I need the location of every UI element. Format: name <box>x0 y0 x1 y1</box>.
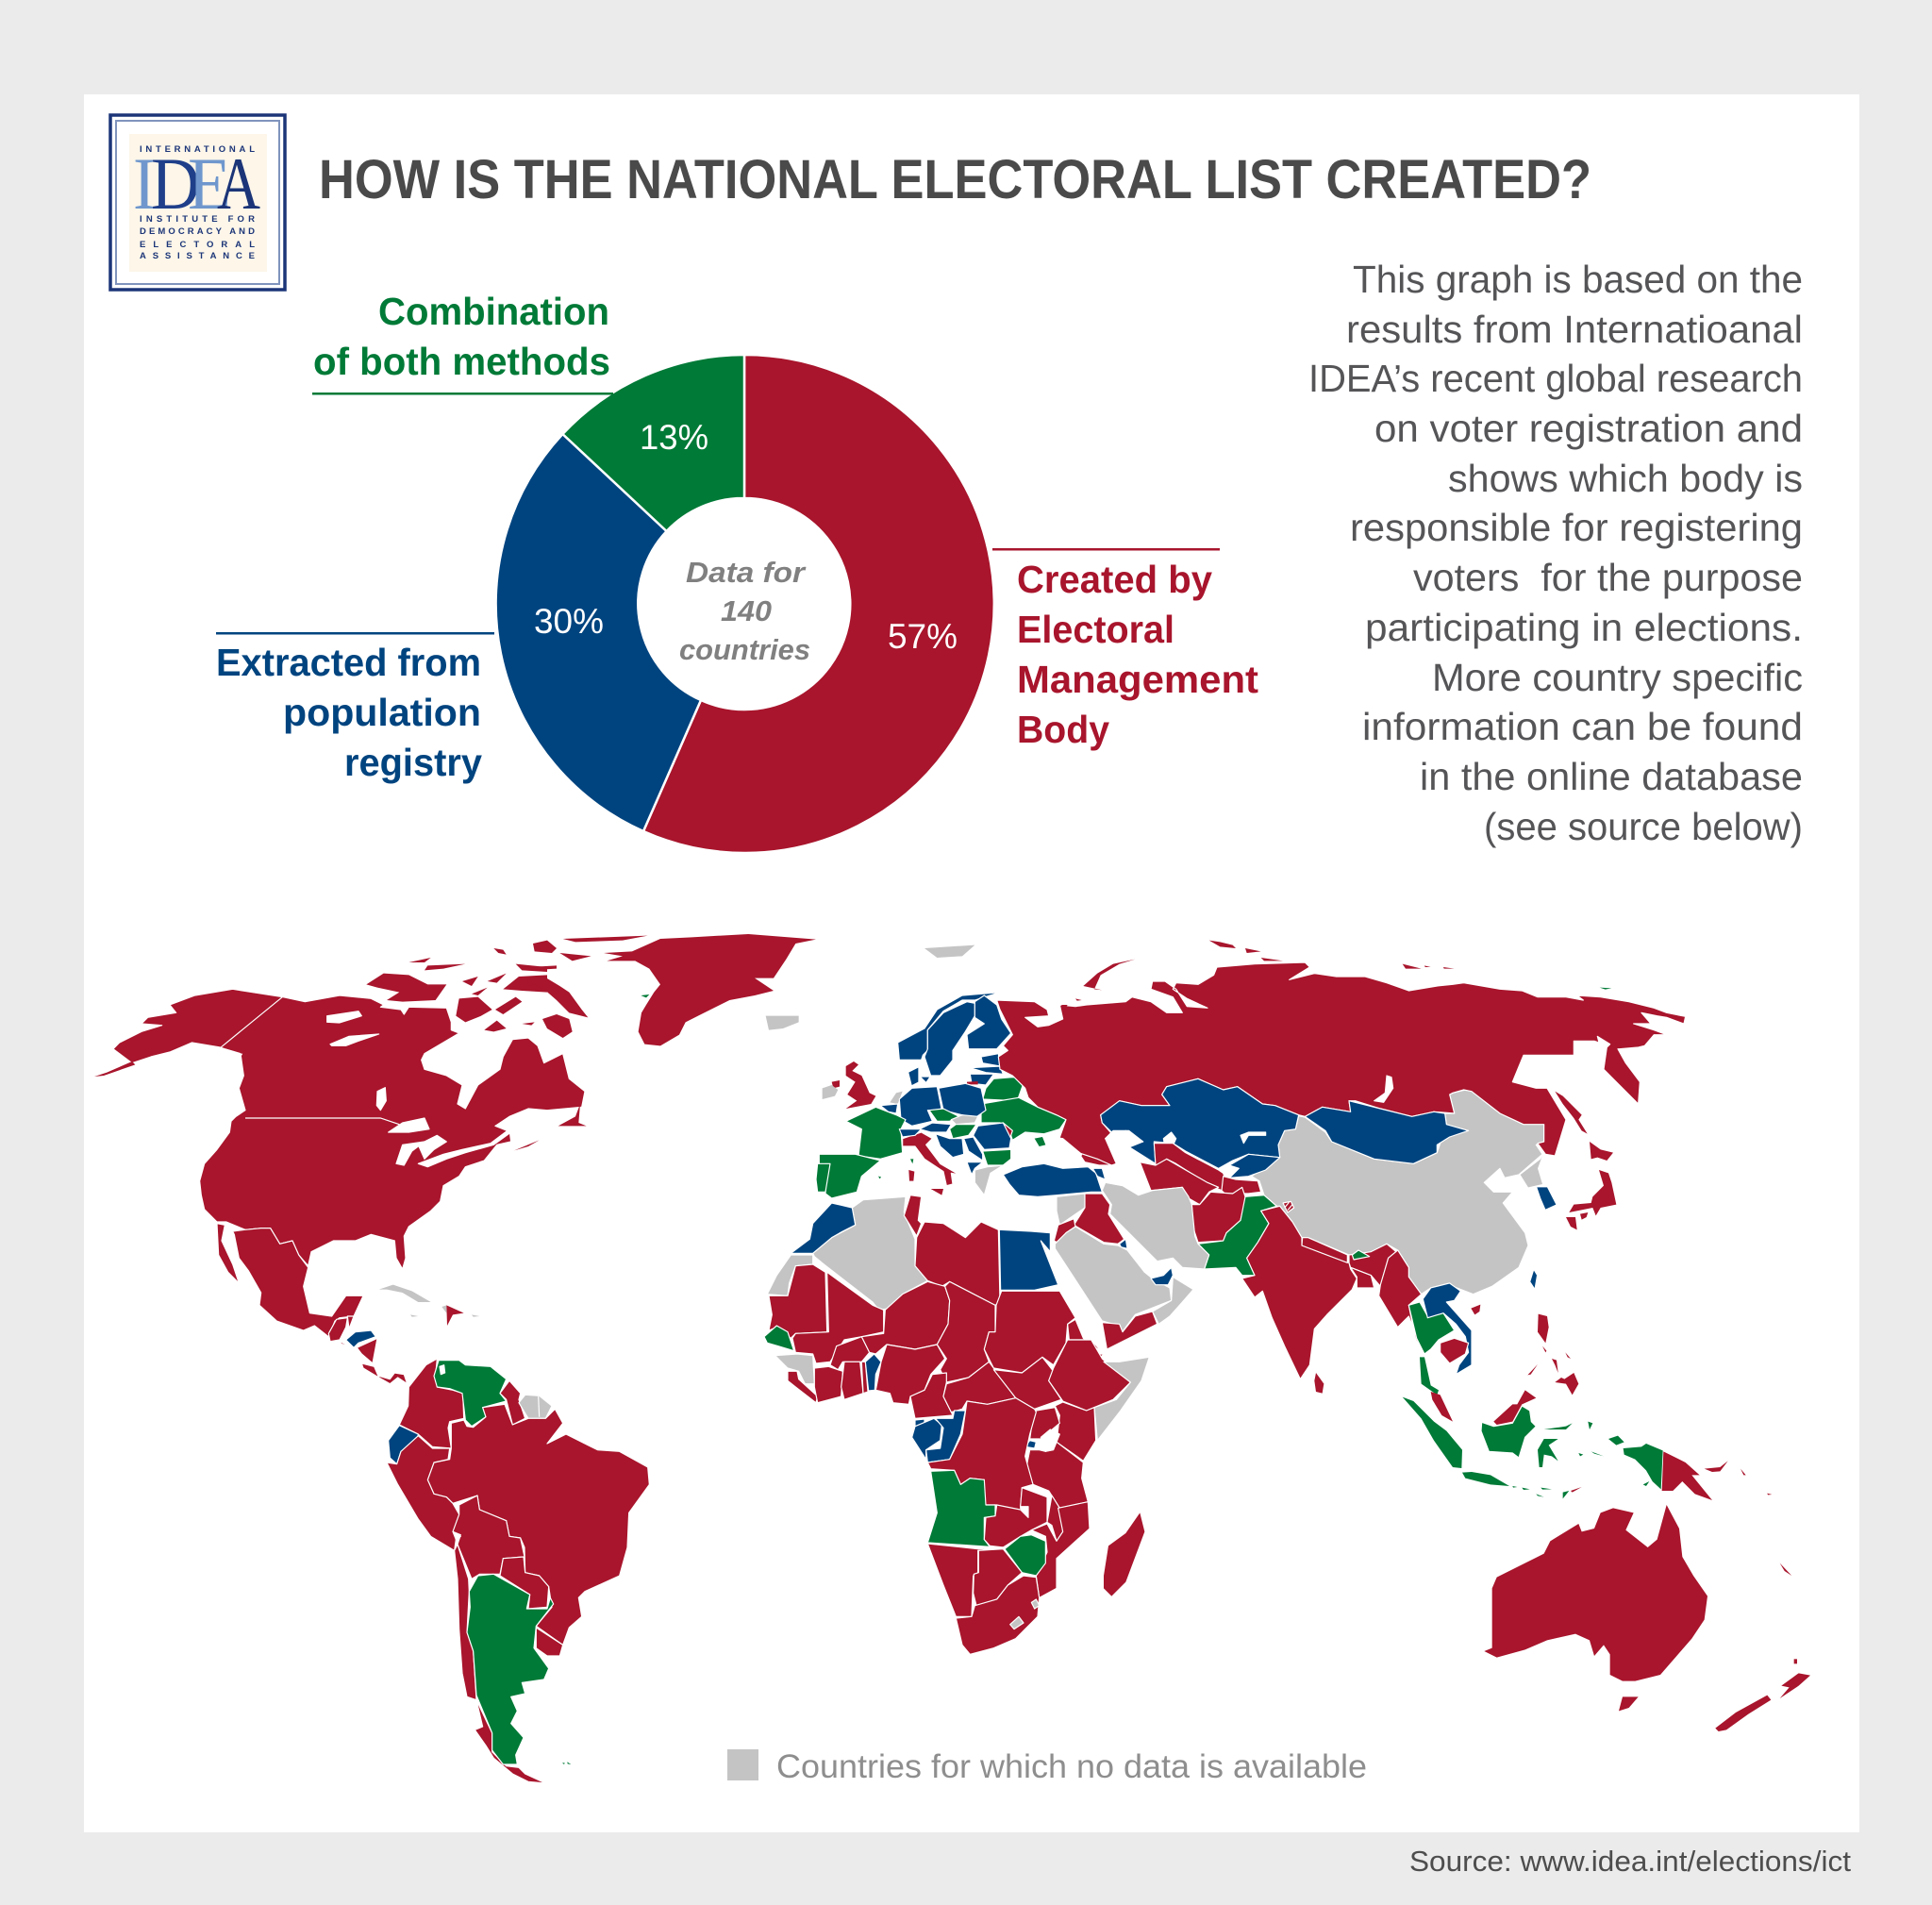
logo: International IDEA: INSTITUTE FOR <box>140 214 255 225</box>
donut percentages: 57% <box>888 617 958 656</box>
label: combination of both methods: Combination <box>378 290 609 333</box>
text block: explanation: IDEA’s recent global research <box>1308 357 1803 400</box>
text block: explanation: on voter registration and <box>1374 407 1803 450</box>
text block: explanation: shows which body is <box>1448 457 1803 500</box>
map: East Asia <box>1471 988 1616 1395</box>
segment: combination 13% <box>562 355 744 531</box>
label: created by electoral management body: Created by <box>1017 558 1212 601</box>
legend: no data: Countries for which no data is available <box>776 1748 1367 1785</box>
text block: explanation: This graph is based on the <box>1353 258 1803 301</box>
logo: International IDEA: I <box>133 142 156 225</box>
text block: explanation: in the online database <box>1420 755 1803 798</box>
text block: explanation: results from Internatioanal <box>1346 308 1803 351</box>
logo: International IDEA: INTERNATIONAL <box>140 144 255 155</box>
logo: International IDEA: E <box>188 142 231 225</box>
map: South America <box>387 1359 649 1783</box>
logo: International IDEA: D <box>151 142 200 225</box>
logo: International IDEA: ELECTORAL <box>140 240 255 250</box>
donut centre note: Data for <box>686 556 807 589</box>
text block: explanation: (see source below) <box>1484 805 1803 848</box>
donut percentages <box>534 418 958 656</box>
map: Europe <box>816 993 1066 1198</box>
label: extracted from population registry <box>216 632 494 784</box>
label: extracted from population registry: registry <box>344 741 482 784</box>
logo: International IDEA: A <box>217 142 260 225</box>
label: created by electoral management body: Body <box>1017 708 1109 751</box>
logo: International IDEA: DEMOCRACY AND <box>140 226 255 237</box>
text block: explanation: More country specific <box>1432 656 1803 699</box>
label: created by electoral management body <box>992 548 1258 751</box>
map: Mexico and Central America <box>217 1224 479 1384</box>
text block: explanation <box>1308 258 1803 848</box>
donut percentages: 13% <box>640 418 708 457</box>
map: Maritime Southeast Asia and Oceania <box>1403 1390 1810 1731</box>
text block: explanation: participating in elections. <box>1365 606 1803 649</box>
text block: explanation: responsible for registering <box>1350 506 1803 549</box>
map: Greenland and Atlantic islands <box>604 934 974 1045</box>
logo: International IDEA <box>110 115 285 290</box>
map: Africa <box>764 1195 1149 1654</box>
world map <box>94 934 1810 1783</box>
donut centre note <box>679 556 810 666</box>
text block: explanation: information can be found <box>1362 705 1803 748</box>
source note: Source: www.idea.int/elections/ict <box>1409 1845 1851 1878</box>
label: created by electoral management body: Management <box>1017 658 1258 701</box>
label: combination of both methods: of both methods <box>313 340 610 383</box>
segment: created by EMB 57% <box>643 355 994 853</box>
title: HOW IS THE NATIONAL ELECTORAL LIST CREATED? <box>319 149 1591 210</box>
donut chart <box>496 355 994 853</box>
label: extracted from population registry: Extracted from <box>216 641 481 684</box>
logo: International IDEA: ASSISTANCE <box>140 251 255 261</box>
label: combination of both methods <box>312 290 613 394</box>
label: created by electoral management body: Electoral <box>1017 608 1174 651</box>
donut centre note: 140 <box>721 594 772 627</box>
text block: explanation: voters for the purpose <box>1413 556 1803 599</box>
segment: population registry 30% <box>496 434 701 831</box>
map: Russia and Central, South and Southeast Asia <box>997 941 1686 1395</box>
donut percentages: 30% <box>534 602 604 641</box>
label: extracted from population registry: population <box>283 691 481 734</box>
donut centre note: countries <box>679 633 810 666</box>
map: North America <box>94 936 648 1384</box>
